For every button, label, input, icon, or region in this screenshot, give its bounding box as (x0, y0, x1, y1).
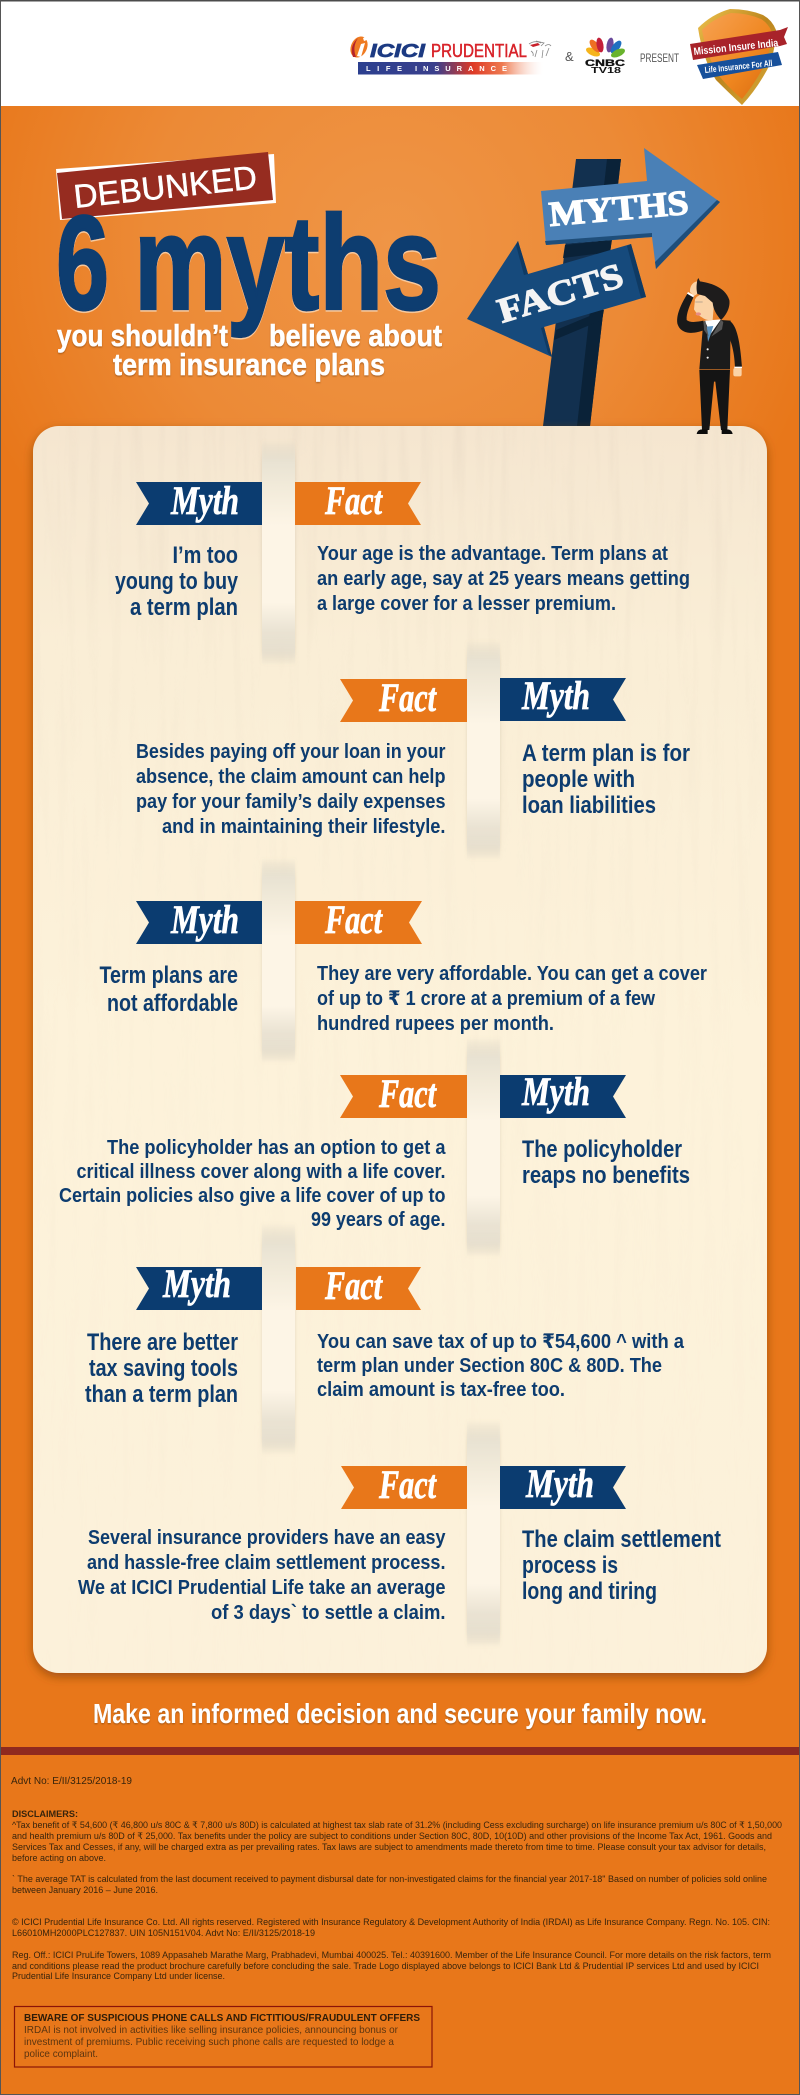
panel: myths and facts card (33, 426, 767, 1673)
callout: fraud warning box: IRDAI is not involved in activities like selling insurance policies, announcing bonus or (24, 2024, 398, 2036)
footer: disclaimers: Services Tax and Cesses, if any, will be charged extra as per prevailing rates. Tax laws are subject to amendments made thereto from time to time. Please consult your tax advisor for details, (12, 1842, 766, 1852)
myth ribbon: Myth (170, 478, 239, 523)
fact text: term plan under Section 80C & 80D. The (317, 1355, 662, 1377)
fact text: an early age, say at 25 years means getting (317, 568, 690, 590)
logo: ICICI Prudential Life Insurance: ICICI (370, 41, 426, 61)
logo: ICICI Prudential Life Insurance: LIFE (366, 64, 402, 73)
pair 5: tax saving (85, 1223, 685, 1455)
fact text: We at ICICI Prudential Life take an average (78, 1577, 446, 1599)
fact text: absence, the claim amount can help (136, 766, 446, 788)
logo: Mission Insure India shield: Life Insurance For All (704, 58, 773, 75)
callout: fraud warning box (14, 2006, 432, 2067)
headline: 6 myths: myths (134, 189, 441, 338)
fact ribbon: Fact (324, 897, 383, 942)
footer: disclaimers: DISCLAIMERS: (12, 1809, 78, 1819)
subtitle (57, 318, 442, 382)
fact text: Your age is the advantage. Term plans at (317, 543, 668, 565)
fact text (78, 1527, 446, 1624)
logo: Mission Insure India shield (690, 9, 788, 105)
fact text (317, 543, 690, 615)
arrow: facts: FACTS (493, 256, 628, 331)
footer: legal notice: Prudential Life Insurance Company Ltd under license. (12, 1971, 225, 1981)
callout: fraud warning box: investment of premiums. Public receiving such phone calls are requested to lodge a (24, 2036, 394, 2048)
fact ribbon (296, 1263, 421, 1310)
myth ribbon: Myth (521, 673, 590, 718)
footer divider band (0, 1747, 800, 1755)
fact text: of 3 days` to settle a claim. (211, 1602, 446, 1624)
footer: disclaimers: and health premium u/s 80D of ₹ 25,000. Tax benefits under the policy are subject to conditions under Section 80C, 80D, 10(10D) and other provisions of the Income Tax Act, 1961. Goods and (12, 1831, 772, 1841)
stamp: Debunked: DEBUNKED (72, 158, 259, 215)
myth text: I’m too (172, 542, 238, 569)
logo: CNBC TV18: CNBC (585, 58, 626, 68)
pair 2: loan liabilities (136, 640, 690, 860)
footer: legal notice: L66010MH2000PLC127837. UIN 105N151V04. Advt No: E/II/3125/2018-19 (12, 1928, 315, 1938)
myth text: The policyholder (522, 1136, 682, 1163)
fact text (317, 963, 707, 1035)
myth text: process is (522, 1552, 618, 1579)
fact ribbon: Fact (324, 478, 383, 523)
myth ribbon: Myth (525, 1461, 594, 1506)
pair 3: not affordable (100, 858, 707, 1063)
hero title block (56, 152, 442, 382)
subtitle: term insurance plans (113, 347, 385, 382)
myth ribbon (500, 673, 626, 721)
fact text: Certain policies also give a life cover of up to (59, 1185, 446, 1207)
myth ribbon: Myth (170, 897, 239, 942)
fact text: hundred rupees per month. (317, 1013, 554, 1035)
ampersand: & (565, 49, 574, 64)
myth text: young to buy (115, 568, 239, 595)
subtitle: you shouldn’t (57, 318, 228, 353)
fact text: They are very affordable. You can get a cover (317, 963, 707, 985)
logo: ICICI Prudential Life Insurance: INSURANCE (415, 64, 507, 73)
myth ribbon (136, 478, 262, 525)
callout: fraud warning box: BEWARE OF SUSPICIOUS PHONE CALLS AND FICTITIOUS/FRAUDULENT OFFERS (24, 2012, 420, 2024)
fact text: pay for your family’s daily expenses (136, 791, 446, 813)
footer: advert number: Advt No: E/II/3125/2018-19 (11, 1776, 132, 1787)
pair 1: too young (115, 440, 690, 665)
fact text: Besides paying off your loan in your (136, 741, 446, 763)
logo: CNBC TV18: TV18 (591, 66, 622, 75)
pair 6: claim settlement (78, 1420, 721, 1647)
fact ribbon (340, 675, 467, 722)
myth text: a term plan (130, 594, 238, 621)
myth text (115, 542, 239, 621)
icon: confused businessman (677, 278, 742, 434)
myth text (522, 1136, 690, 1189)
post (543, 159, 621, 426)
footer: disclaimers: ` The average TAT is calculated from the last document received to payment disbursal date for non-investigated claims for the financial year 2017-18" Based on number of policies sold online (12, 1874, 767, 1884)
logo: ICICI Prudential Life Insurance: PRUDENTIAL (431, 40, 527, 61)
fact text: 99 years of age. (311, 1209, 446, 1231)
fact ribbon (295, 897, 422, 944)
myth text: reaps no benefits (522, 1162, 690, 1189)
footer: legal notice: © ICICI Prudential Life Insurance Co. Ltd. All rights reserved. Registered with Insurance Regulatory & Development Authority of India (IRDAI) as Life Insurance Company. Regn. No. 105. CIN: (12, 1917, 770, 1927)
fact text: and in maintaining their lifestyle. (162, 816, 446, 838)
myth ribbon: Myth (521, 1069, 590, 1114)
fact text: critical illness cover along with a life cover. (76, 1161, 446, 1183)
myth ribbon: Myth (162, 1261, 231, 1306)
fact text (136, 741, 446, 838)
fact text: and hassle-free claim settlement process. (87, 1552, 446, 1574)
fact ribbon (340, 1071, 467, 1118)
fact text: of up to ₹ 1 crore at a premium of a few (317, 988, 655, 1010)
footer: disclaimers (12, 1809, 782, 1895)
fact text (317, 1331, 685, 1401)
myth text (522, 740, 690, 819)
logo: ICICI Prudential Life Insurance (347, 34, 551, 74)
footer: legal notice: and conditions please read the product brochure carefully before concluding the sale. Trade Logo displayed above belongs to ICICI Bank Ltd & Prudential IP services Ltd and used by ICICI (12, 1961, 759, 1971)
fact ribbon: Fact (378, 1071, 437, 1116)
myth text: long and tiring (522, 1578, 657, 1605)
header: sponsor logos (0, 0, 800, 106)
callout: fraud warning box: police complaint. (24, 2048, 98, 2060)
fact ribbon (341, 1462, 467, 1509)
myth ribbon (500, 1069, 626, 1118)
arrow: myths (541, 148, 720, 269)
logo: Mission Insure India shield: Mission Insure India (693, 37, 779, 58)
subtitle: believe about (269, 318, 442, 353)
myth text: A term plan is for (522, 740, 690, 767)
footer: disclaimers: before acting on above. (12, 1853, 106, 1863)
myth text: tax saving tools (89, 1355, 238, 1382)
pair 4: no benefits (59, 1037, 690, 1257)
fact ribbon: Fact (324, 1263, 383, 1308)
fact ribbon (295, 478, 421, 525)
myth text: There are better (87, 1329, 238, 1356)
myth text: Term plans are (100, 962, 238, 989)
myth text: not affordable (107, 990, 238, 1017)
myth text: The claim settlement (522, 1526, 721, 1553)
myth text (85, 1329, 238, 1408)
fact text (59, 1137, 446, 1231)
myth text: than a term plan (85, 1381, 238, 1408)
fact text: claim amount is tax-free too. (317, 1379, 565, 1401)
signpost illustration (467, 148, 720, 426)
myth ribbon (136, 1261, 262, 1310)
fact text: Several insurance providers have an easy (88, 1527, 446, 1549)
myth ribbon (500, 1461, 626, 1509)
fact text: You can save tax of up to ₹54,600 ^ with a (317, 1331, 685, 1353)
footer: legal notice: Reg. Off.: ICICI PruLife Towers, 1089 Appasaheb Marathe Marg, Prabhadevi, Mumbai 400025. Tel.: 40391600. Member of the Life Insurance Council. For more details on the risk factors, term (12, 1950, 771, 1960)
present label: PRESENT (640, 51, 679, 65)
myth text (522, 1526, 721, 1605)
myth ribbon (136, 897, 262, 944)
myth text: people with (522, 766, 635, 793)
myth text: loan liabilities (522, 792, 656, 819)
arrow: facts (467, 241, 646, 357)
footer: disclaimers: between January 2016 – June 2016. (12, 1885, 158, 1895)
fact text: a large cover for a lesser premium. (317, 593, 616, 615)
logo: CNBC TV18 (585, 37, 626, 75)
fact ribbon: Fact (378, 1462, 437, 1507)
arrow: myths: MYTHS (547, 183, 690, 234)
headline: 6 myths: 6 (56, 189, 109, 338)
footer: disclaimers: ^Tax benefit of ₹ 54,600 (₹ 46,800 u/s 80C & ₹ 7,800 u/s 80D) is calculated at highest tax slab rate of 31.2% (including Cess excluding surcharge) on life insurance premium u/s 80C of ₹ 1,50,000 (12, 1820, 782, 1830)
fact text: The policyholder has an option to get a (107, 1137, 446, 1159)
myth text (100, 962, 238, 1017)
footer: legal notice (12, 1917, 771, 1981)
headline: 6 myths (56, 189, 441, 338)
fact ribbon: Fact (378, 675, 437, 720)
